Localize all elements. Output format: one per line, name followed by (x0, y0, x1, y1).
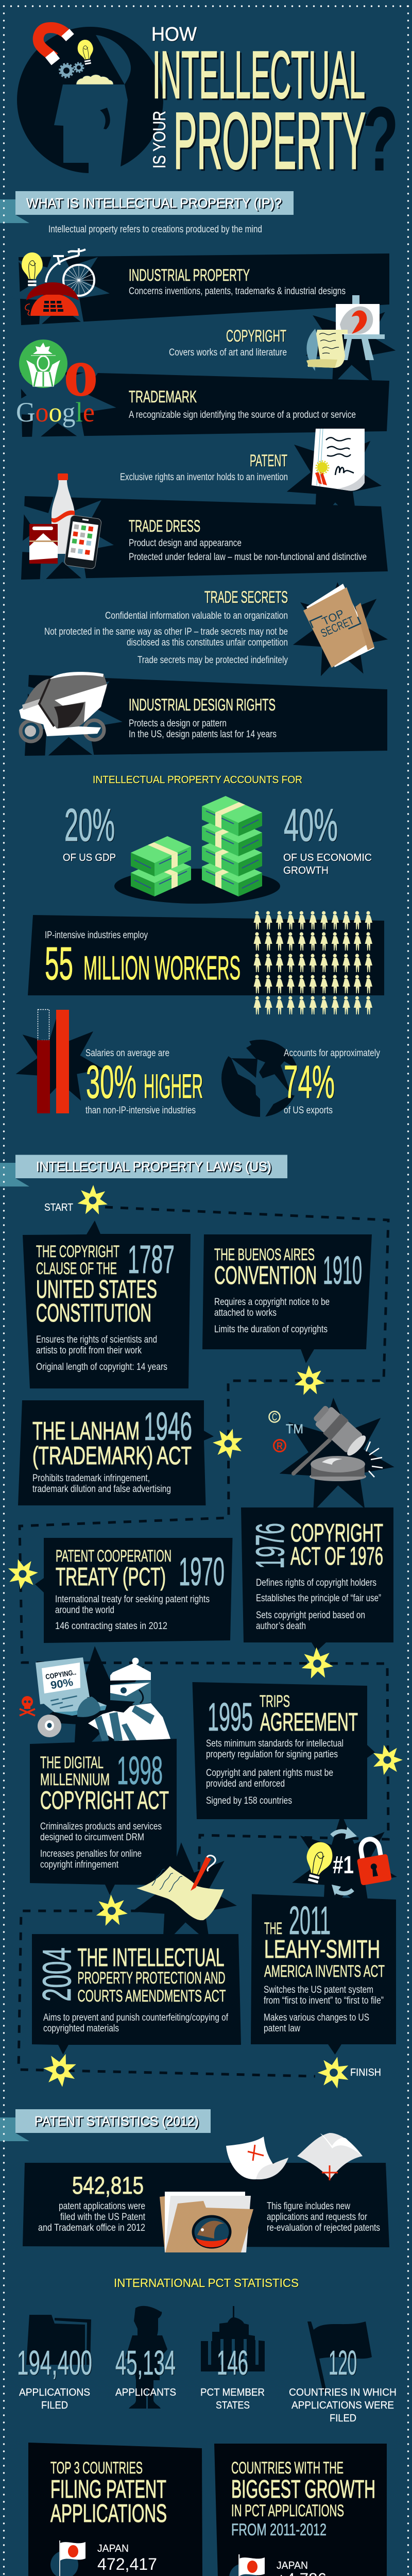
icon: rejected paper right (297, 2133, 363, 2180)
panel: IP protection and courts amendments act 2004 (32, 1934, 241, 2055)
body (214, 1297, 330, 1335)
body: Limits the duration of copyrights (214, 1324, 328, 1335)
title: HOW (151, 24, 197, 45)
panel: TRIPS agreement 1995 (193, 1682, 375, 1819)
body: artists to profit from their work (36, 1345, 142, 1356)
row: japan (50, 2540, 157, 2576)
title (150, 24, 399, 190)
body: Signed by 158 countries (206, 1795, 292, 1806)
icon: smartphone (64, 515, 102, 569)
body (55, 1594, 210, 1632)
start marker: START (44, 1202, 73, 1213)
panel: copyright (169, 295, 396, 385)
body (32, 1473, 171, 1495)
icon: flag (307, 2321, 372, 2392)
stat: PCT member states (200, 2306, 265, 2411)
body: A recognizable sign identifying the source of a product or service (129, 410, 356, 420)
heading: TRADE SECRETS (204, 588, 288, 606)
left text: patent applications were (59, 2201, 145, 2212)
stat: salaries 30% higher: Salaries on average are (85, 1048, 169, 1059)
marker (209, 1424, 248, 1462)
body (44, 611, 288, 666)
body: Defines rights of copyright holders (256, 1578, 376, 1588)
heading (32, 1417, 192, 1470)
stat: 40% of growth: OF US ECONOMIC (283, 852, 372, 863)
icon: globe (219, 1036, 301, 1117)
body (264, 1985, 384, 2034)
year: 1787 (128, 1238, 175, 1282)
section banner: patent statistics (0, 2109, 211, 2141)
title illustration: head with ideas (17, 27, 163, 178)
icon: building (201, 2306, 265, 2371)
right text: re-evaluation of rejected patents (267, 2223, 380, 2233)
stat: countries: 120 (329, 2344, 357, 2382)
heading (50, 2459, 167, 2528)
text: HIGHER (144, 1067, 203, 1105)
heading: IN PCT APPLICATIONS (231, 2501, 344, 2520)
heading (214, 1245, 317, 1290)
stat: 20% of GDP: OF US GDP (63, 852, 116, 863)
icon: cigarette pack (29, 524, 58, 564)
year: 1946 (144, 1404, 192, 1449)
year: 1970 (179, 1550, 225, 1594)
big number: 542,815 (72, 2172, 144, 2199)
body: property regulation for signing parties (206, 1749, 338, 1760)
stat: applicants (115, 2306, 176, 2409)
stat: salaries 30% higher: 30% (86, 1057, 136, 1108)
body: Confidential information valuable to an organization (105, 611, 288, 621)
body: around the world (55, 1605, 114, 1616)
body (36, 1334, 167, 1372)
heading: COPYRIGHT (226, 327, 286, 345)
heading (260, 1692, 358, 1736)
section banner: IP laws: INTELLECTUAL PROPERTY LAWS (US) (36, 1159, 271, 1174)
stat: applications filed: FILED (41, 2400, 68, 2411)
stat: 74% of exports: 74% (284, 1057, 335, 1108)
body: Ensures the rights of scientists and (36, 1334, 157, 1345)
stat: applications filed: APPLICATIONS (19, 2387, 90, 2398)
left text: filed with the US Patent (60, 2212, 146, 2223)
body (43, 2012, 229, 2034)
heading: FILING PATENT (50, 2476, 166, 2503)
body: provided and enforced (206, 1778, 285, 1789)
panel: leahy-smith 2011 (251, 1894, 396, 2055)
heading: PATENT (250, 451, 287, 470)
heading (36, 1242, 157, 1327)
panel: 55 million workers (28, 911, 384, 1014)
panel: industrial property (10, 242, 389, 326)
panel: industrial design rights (12, 665, 387, 758)
copyright symbol (269, 1412, 280, 1423)
icon: bottle (52, 473, 75, 554)
body: copyright infringement (40, 1859, 119, 1870)
heading: (TRADEMARK) ACT (32, 1442, 192, 1470)
section banner: IP laws (0, 1155, 287, 1187)
timeline path (19, 1207, 388, 2076)
icon: top secret folder: TOP (320, 607, 346, 628)
body: International treaty for seeking patent rights (55, 1594, 210, 1605)
big number: 55 (45, 938, 73, 990)
panel: trade secrets (44, 582, 388, 676)
panel: copyright act 1976 (241, 1507, 393, 1651)
section banner: what is IP: WHAT IS INTELLECTUAL PROPERTY (IP)? (26, 195, 282, 211)
text: IP-intensive industries employ (45, 930, 148, 941)
stat: applications filed (17, 2315, 92, 2411)
heading: TRIPS (260, 1692, 290, 1710)
panel: buenos aires convention 1910 (202, 1234, 372, 1363)
body: Sets copyright period based on (256, 1610, 365, 1621)
body (129, 538, 367, 563)
intro text: Intellectual property refers to creations produced by the mind (48, 224, 262, 235)
heading: INDUSTRIAL PROPERTY (129, 266, 250, 284)
logo text: google: Google (16, 397, 95, 428)
panel: copyright clause 1787 (23, 1221, 191, 1388)
stat: 74% of exports: of US exports (284, 1105, 333, 1116)
heading (56, 1547, 171, 1591)
stat: salaries 30% higher: than non-IP-intensive industries (85, 1105, 196, 1116)
stat: 20% of GDP: 20% (64, 799, 115, 851)
right text (267, 2201, 380, 2233)
finish marker (316, 2055, 381, 2091)
section banner: patent statistics: PATENT STATISTICS (2012) (35, 2113, 199, 2129)
icon: laptop (36, 1657, 107, 1716)
row: japan: 472,417 (97, 2555, 157, 2573)
icon: skull (20, 1696, 35, 1716)
heading: THE LANHAM (32, 1417, 140, 1445)
illustration: first to file icons (292, 1814, 397, 1918)
title: IS YOUR (150, 111, 169, 168)
marker (96, 1895, 128, 1926)
icon: coffee logo (19, 340, 67, 388)
panel: top 3 countries (28, 2443, 203, 2576)
year: 1995 (208, 1695, 253, 1739)
body: Prohibits trademark infringement, (32, 1473, 150, 1484)
heading: CLAUSE OF THE (36, 1259, 117, 1278)
stat: countries: COUNTRIES IN WHICH (289, 2387, 397, 2398)
heading (231, 2459, 375, 2539)
body: Not protected in the same way as other IP – trade secrets may not be (44, 626, 288, 637)
finish marker: FINISH (350, 2067, 381, 2078)
heading: THE INTELLECTUAL (77, 1944, 225, 1972)
icon: gears (60, 63, 83, 77)
heading: PROPERTY PROTECTION AND (77, 1969, 226, 1987)
left text: and Trademark office in 2012 (38, 2223, 145, 2233)
stat: 40% of growth: 40% (284, 799, 338, 851)
stat: salaries 30% higher (16, 1010, 203, 1116)
body: 146 contracting states in 2012 (55, 1621, 167, 1632)
panel: 55 million workers: MILLION WORKERS (83, 949, 241, 987)
heading: FROM 2011-2012 (231, 2520, 327, 2539)
stat: applicants: 45,134 (115, 2344, 176, 2382)
heading (290, 1519, 383, 1570)
illustration: copyright pirate (20, 1646, 170, 1760)
row: japan (229, 2554, 327, 2576)
panel: patent (120, 422, 382, 527)
year: 2004 (34, 1947, 79, 2002)
icon: red O logo (66, 363, 96, 396)
heading: THE (264, 1919, 282, 1938)
body (129, 718, 277, 740)
chart: people icons (253, 911, 372, 1014)
icon: thief (77, 1658, 170, 1742)
registered symbol (274, 1439, 285, 1452)
body: author’s death (256, 1621, 306, 1632)
panel: biggest growth (214, 2444, 387, 2576)
stat: PCT member states: PCT MEMBER (200, 2387, 265, 2398)
left text (38, 2201, 146, 2233)
icon: folder with seal (160, 2192, 253, 2252)
panel: patent cooperation treaty 1970 (35, 1538, 233, 1643)
panel: leahy-smith 2011: 2011 (289, 1899, 331, 1943)
icon: penny-farthing (46, 248, 94, 296)
body (40, 1821, 162, 1870)
heading: THE BUENOS AIRES (214, 1245, 315, 1264)
big number (45, 938, 241, 990)
stat: PCT member states: 146 (217, 2344, 248, 2382)
body: Concerns inventions, patents, trademarks & industrial designs (129, 286, 346, 297)
body: Aims to prevent and punish counterfeiting/copying of (43, 2012, 229, 2023)
right text: applications and requests for (267, 2212, 368, 2223)
panel: trademark (0, 340, 389, 444)
body: Criminalizes products and services (40, 1821, 162, 1832)
heading: IP accounts for: INTELLECTUAL PROPERTY ACCOUNTS FOR (93, 774, 302, 786)
icon: magnet (38, 27, 70, 62)
stat: applicants: APPLICANTS (115, 2387, 176, 2398)
heading: APPLICATIONS (50, 2500, 167, 2528)
heading (264, 1919, 385, 1980)
body: Makes various changes to US (264, 2012, 369, 2023)
icon: bulb (22, 252, 43, 286)
stat: 20% of GDP (63, 799, 116, 863)
body: In the US, design patents last for 14 years (129, 729, 277, 740)
heading: international PCT statistics: INTERNATIONAL PCT STATISTICS (114, 2276, 299, 2290)
stat: 74% of exports (219, 1036, 380, 1117)
body: Product design and appearance (129, 538, 242, 549)
marker (302, 1648, 333, 1679)
body: from “first to invent” to “first to file” (264, 1995, 384, 2006)
body: Requires a copyright notice to be (214, 1297, 330, 1308)
heading: UNITED STATES (36, 1276, 157, 1303)
stat: countries (289, 2321, 397, 2424)
body: attached to works (214, 1308, 277, 1318)
chart: salary bars (37, 1010, 69, 1113)
heading: MILLENNIUM (40, 1770, 110, 1789)
icon: stacks of money (114, 796, 280, 904)
stat: applications filed: 194,400 (17, 2344, 92, 2382)
panel: patent applications (23, 2133, 389, 2252)
body (206, 1738, 344, 1806)
body: designed to circumvent DRM (40, 1832, 144, 1843)
body: Covers works of art and literature (169, 347, 287, 358)
icon: bulb (301, 1839, 336, 1885)
section banner: what is IP (0, 191, 294, 223)
start marker (44, 1184, 109, 1216)
heading: CONSTITUTION (36, 1299, 151, 1327)
body: Increases penalties for online (40, 1849, 142, 1859)
heading: THE DIGITAL (40, 1753, 104, 1772)
icon: gavel with symbols (269, 1398, 394, 1512)
panel: trade dress (9, 473, 388, 586)
stat: 74% of exports: Accounts for approximately (284, 1048, 380, 1059)
icon: folder (26, 2315, 91, 2365)
body: Sets minimum standards for intellectual (206, 1738, 344, 1749)
body: Trade secrets may be protected indefinitely (138, 655, 288, 666)
illustration: signed paper and pen (132, 1842, 237, 1946)
heading: COPYRIGHT ACT (40, 1787, 169, 1815)
body: trademark dilution and false advertising (32, 1484, 171, 1495)
heading (77, 1944, 226, 2005)
icon: telephone (25, 282, 79, 316)
heading: COURTS AMENDMENTS ACT (77, 1987, 226, 2005)
row: japan: JAPAN (277, 2560, 308, 2571)
marker (370, 1742, 405, 1776)
right text: This figure includes new (267, 2201, 350, 2212)
icon: quill and scroll (306, 329, 348, 371)
icon: laptop: 90% (50, 1676, 74, 1691)
heading: CONVENTION (214, 1262, 317, 1290)
stat: 40% of growth (283, 799, 372, 876)
panel: buenos aires convention 1910: 1910 (323, 1248, 362, 1293)
heading: TRADEMARK (129, 387, 197, 406)
icon: easel and painting (336, 295, 385, 360)
heading: COUNTRIES WITH THE (231, 2459, 344, 2477)
icon: top secret folder (303, 584, 374, 668)
heading: INDUSTRIAL DESIGN RIGHTS (129, 696, 276, 714)
body: patent law (264, 2023, 300, 2034)
icon: top secret folder: SECRET (319, 614, 356, 640)
stat: countries: FILED (330, 2413, 356, 2424)
label: #1 (333, 1852, 354, 1879)
icon: concept car (19, 672, 107, 741)
stat: PCT member states: STATES (216, 2400, 250, 2411)
body: Protects a design or pattern (129, 718, 227, 729)
icon: person silhouette (125, 2306, 167, 2409)
heading: TREATY (PCT) (56, 1563, 166, 1591)
heading: PATENT COOPERATION (56, 1547, 171, 1565)
row: japan: JAPAN (97, 2543, 129, 2554)
marker (38, 2047, 82, 2092)
body: Switches the US patent system (264, 1985, 373, 1995)
body: Establishes the principle of “fair use” (256, 1593, 381, 1604)
marker (4, 1555, 41, 1591)
registered symbol: R (277, 1441, 283, 1452)
stat: countries: APPLICATIONS WERE (291, 2400, 394, 2411)
trademark symbol: TM (286, 1422, 303, 1436)
icon: padlock (354, 1837, 392, 1886)
icon: rejected paper left (226, 2137, 288, 2179)
panel: lanham act 1946 (18, 1400, 214, 1505)
icon: laptop: COPYING.. (45, 1668, 77, 1681)
year: 1976 (247, 1523, 293, 1569)
year: 1998 (117, 1749, 163, 1793)
panel: digital millennium copyright act 1998 (30, 1739, 177, 1895)
heading: TOP 3 COUNTRIES (50, 2459, 143, 2477)
stat: 40% of growth: GROWTH (283, 865, 329, 876)
marker (295, 1365, 324, 1395)
icon: light bulb (76, 39, 96, 65)
heading: THE COPYRIGHT (36, 1242, 119, 1261)
icon: patent document (312, 429, 365, 491)
body: Original length of copyright: 14 years (36, 1362, 167, 1372)
copyright symbol: C (272, 1412, 277, 1423)
body: copyrighted materials (43, 2023, 119, 2034)
body: Exclusive rights an inventor holds to an invention (120, 472, 288, 483)
heading: TRADE DRESS (129, 517, 200, 535)
body: Copyright and patent rights must be (206, 1768, 333, 1778)
body (256, 1578, 381, 1632)
body: disclosed as this constitutes unfair competition (127, 637, 288, 648)
heading (40, 1753, 169, 1815)
icon: disc (38, 1715, 61, 1737)
icon: arrows (332, 1831, 353, 1893)
icon: brain (76, 75, 113, 84)
